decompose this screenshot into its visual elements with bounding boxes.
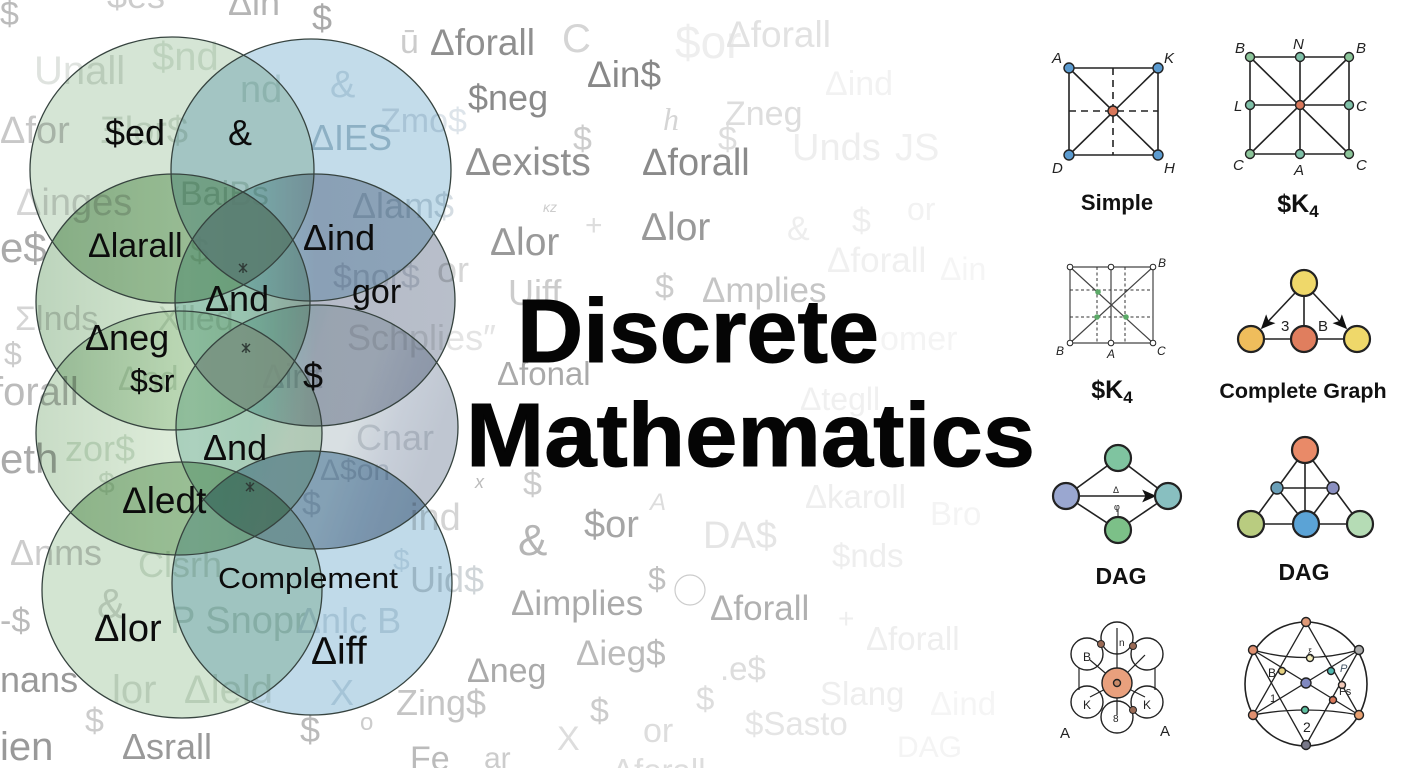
background: scattered faded math symbols: DAG (897, 731, 962, 764)
background: scattered faded math symbols: $or (584, 504, 639, 546)
background: scattered faded math symbols: or (437, 249, 469, 290)
background: scattered faded math symbols: or (643, 712, 673, 750)
background: scattered faded math symbols: $ (655, 268, 674, 306)
background: scattered faded math symbols: X (330, 672, 354, 713)
graph: circular star: 1 (1270, 693, 1276, 705)
graph: K4 grid: N (1293, 36, 1304, 53)
background: scattered faded math symbols: Δneg (467, 652, 546, 690)
background: scattered faded math symbols: Uiff (508, 272, 562, 313)
graph: Simple: K (1164, 50, 1175, 67)
background: scattered faded math symbols: $ (4, 336, 22, 372)
graph: Simple: Simple (1081, 190, 1153, 215)
background: scattered faded math symbols: $ (718, 120, 737, 158)
background: scattered faded math symbols: $Sasto (745, 705, 848, 742)
background: scattered faded math symbols: Δfor (0, 110, 70, 152)
background: scattered faded math symbols: Ξlor$ (100, 110, 188, 152)
background: scattered faded math symbols: e$ (0, 224, 47, 271)
background: scattered faded math symbols: & (787, 210, 810, 248)
graph: Simple: H (1164, 160, 1175, 177)
background: scattered faded math symbols: $ (573, 120, 592, 158)
venn region labels: Δlarall (88, 227, 183, 265)
background: scattered faded math symbols: Δforall (642, 142, 750, 184)
background: scattered faded math symbols: h (663, 101, 679, 137)
background: scattered faded math symbols: Δtegll (800, 381, 880, 417)
background: scattered faded math symbols: $ (393, 544, 410, 577)
graph: Simple (1051, 50, 1175, 215)
venn region labels: Δneg (85, 317, 169, 358)
background: scattered faded math symbols: zor$ (65, 428, 135, 469)
background: scattered faded math symbols: Schplies″ (347, 317, 496, 358)
background: scattered faded math symbols: P Snopr (170, 600, 307, 642)
background: scattered faded math symbols: lor (112, 668, 156, 712)
graph: K4 grid: B (1356, 40, 1366, 57)
venn region labels: Δiff (311, 630, 367, 673)
background: scattered faded math symbols: Δlam$ (352, 185, 454, 226)
graph: DAG diamond (1053, 445, 1181, 589)
background: scattered faded math symbols: Zing$ (396, 682, 486, 723)
graph: K4 grid: C (1356, 98, 1367, 115)
graph: wheel of circles (1060, 622, 1170, 742)
graph: DAG diamond: DAG (1095, 563, 1147, 589)
graph: K4 dashed lattice: 4 (1123, 388, 1133, 407)
graph: wheel of circles: B (1083, 650, 1091, 664)
background: scattered faded math symbols: X (557, 720, 580, 758)
background: scattered faded math symbols (0, 0, 996, 768)
background: scattered faded math symbols: Unds (792, 127, 881, 169)
background: scattered faded math symbols: $ (648, 561, 666, 597)
background: scattered faded math symbols: $ (523, 465, 542, 503)
background: scattered faded math symbols: Δlor (641, 206, 710, 249)
graph: K4 grid: 4 (1309, 202, 1319, 221)
background: scattered faded math symbols: Δirft (262, 358, 323, 396)
venn diagram (30, 37, 460, 718)
background: scattered faded math symbols: Δsrall (122, 726, 212, 767)
graph: wheel of circles: K (1083, 698, 1091, 712)
graph: Complete Graph: Complete Graph (1219, 379, 1387, 403)
background: scattered faded math symbols: Δforall (710, 589, 809, 628)
venn region labels: $ed (105, 112, 165, 153)
background: scattered faded math symbols: Zneg (725, 95, 802, 133)
graph: circular star: ξ (1308, 647, 1312, 657)
background: scattered faded math symbols: A (648, 489, 666, 516)
graph: circular star: 2 (1303, 719, 1311, 735)
graph: K4 grid: L (1234, 98, 1242, 115)
background: scattered faded math symbols: $nd (152, 35, 219, 79)
background: scattered faded math symbols: $or (675, 16, 741, 68)
background: scattered faded math symbols: Zmo$ (380, 102, 467, 140)
background: scattered faded math symbols: .e$ (720, 650, 766, 687)
graph: wheel of circles: A (1060, 725, 1070, 742)
graph: K4 grid: C (1356, 157, 1367, 174)
graph: DAG diamond: φ (1114, 502, 1120, 512)
background: scattered faded math symbols: nd (240, 69, 282, 111)
background: scattered faded math symbols: Δlor (490, 221, 559, 264)
background: scattered faded math symbols: Δind (930, 685, 996, 722)
graph: Complete Graph (1219, 270, 1387, 403)
venn region labels: Δind (303, 217, 375, 258)
background: scattered faded math symbols: Δnlc B (297, 600, 401, 641)
background: scattered faded math symbols: Δind (825, 65, 893, 103)
background: scattered faded math symbols: & (518, 516, 547, 565)
background: scattered faded math symbols: Clsrh (138, 544, 222, 585)
background: scattered faded math symbols: $ (590, 692, 609, 730)
graph: Simple: A (1051, 50, 1062, 67)
background: scattered faded math symbols: Uid$ (410, 559, 484, 600)
background: scattered faded math symbols: Slang (820, 675, 904, 712)
graph: K4 dashed lattice: B (1056, 344, 1064, 358)
background: scattered faded math symbols: or (907, 191, 936, 227)
graph: Complete Graph: 3 (1281, 318, 1289, 335)
background: scattered faded math symbols: omer (880, 320, 957, 358)
background: scattered faded math symbols: Δieg$ (576, 634, 666, 673)
venn region labels: gor (352, 273, 401, 311)
background: scattered faded math symbols: DA$ (703, 515, 777, 557)
background: scattered faded math symbols: Δinges (16, 182, 132, 224)
background: scattered faded math symbols: Δin (940, 251, 986, 287)
background: scattered faded math symbols: κz (543, 199, 557, 215)
graph: K4 dashed lattice: B (1158, 256, 1166, 270)
background: scattered faded math symbols: Δkaroll (805, 478, 906, 515)
graph: K4 grid (1233, 36, 1367, 221)
background: scattered faded math symbols: Cnar (356, 417, 434, 458)
venn circles (30, 37, 460, 718)
background: scattered faded math symbols: $nds (832, 537, 904, 574)
venn region labels: Δlor (94, 608, 162, 650)
graph: DAG triangle (1238, 437, 1373, 585)
graph: K4 dashed lattice: $K (1091, 376, 1123, 404)
background: scattered faded math symbols: o (360, 709, 373, 736)
title (466, 282, 1035, 486)
background: scattered faded math symbols: & (97, 580, 125, 627)
background: scattered faded math symbols: JS (895, 127, 939, 169)
background: scattered faded math symbols: $nor$ (333, 258, 420, 296)
background: scattered faded math symbols: x (474, 472, 485, 492)
background: scattered faded math symbols: $neg (468, 77, 548, 118)
venn region labels: Δledt (122, 480, 207, 521)
background: scattered faded math symbols: $ (302, 485, 321, 523)
venn region labels: Complement (218, 563, 398, 595)
venn region labels: Δnd (205, 278, 269, 319)
graph: K4 dashed lattice (1056, 256, 1166, 407)
title: Discrete (517, 282, 879, 382)
background: scattered faded math symbols: BaiBs (180, 175, 269, 213)
graph: circular star (1245, 618, 1367, 750)
graph: wheel of circles: K (1143, 698, 1151, 712)
background: scattered faded math symbols: $ (696, 680, 714, 717)
graph: wheel of circles: A (1160, 723, 1170, 740)
graph: K4 grid: B (1235, 40, 1245, 57)
background: scattered faded math symbols: Xlled (158, 300, 234, 338)
background: scattered faded math symbols: C (562, 17, 591, 61)
graph: DAG diamond: Δ (1113, 485, 1119, 495)
background: scattered faded math symbols: Σlnds (15, 300, 98, 338)
background: scattered faded math symbols: Δleld (184, 668, 273, 712)
background: scattered faded math symbols: Δforall (726, 14, 831, 55)
background: scattered faded math symbols: & (330, 64, 355, 106)
background: scattered faded math symbols: Δforall (866, 620, 960, 657)
background: scattered faded math symbols: $ (85, 702, 104, 740)
background: scattered faded math symbols: Δimplies (511, 584, 643, 623)
background: scattered faded math symbols: ind (410, 497, 461, 539)
graph: Complete Graph: B (1318, 318, 1328, 335)
background: scattered faded math symbols: + (585, 209, 603, 242)
background: scattered faded math symbols: $ (98, 467, 115, 500)
background: scattered faded math symbols: Δfonal (497, 355, 591, 392)
graph: K4 grid: $K (1277, 190, 1309, 218)
background: scattered faded math symbols: Δexists (465, 141, 591, 184)
graph: circular star: B (1268, 666, 1276, 680)
background: scattered faded math symbols: Unall (34, 49, 125, 93)
title: Mathematics (466, 386, 1035, 486)
graph: K4 grid: C (1233, 157, 1244, 174)
venn intersection stars (239, 263, 254, 492)
background: scattered faded math symbols: nans (0, 659, 78, 700)
background: scattered faded math symbols: Δforall (827, 241, 926, 280)
graph: wheel of circles: 8 (1113, 714, 1119, 725)
graph: K4 dashed lattice: A (1106, 347, 1115, 361)
background: scattered faded math symbols: + (838, 603, 854, 634)
background: scattered faded math symbols: Δmplies (702, 271, 827, 310)
graph: circular star: Fs (1339, 686, 1352, 698)
background: scattered faded math symbols: eth (0, 435, 58, 482)
background: scattered faded math symbols: ū (400, 23, 419, 61)
venn region labels (85, 112, 401, 673)
background: scattered faded math symbols: Δnd (118, 360, 179, 398)
background: scattered faded math symbols: $ (300, 709, 320, 750)
background: scattered faded math symbols: Δin$ (587, 54, 661, 95)
venn region labels: Δnd (203, 427, 267, 468)
background: scattered faded math symbols: Δnms (10, 532, 102, 573)
graph: Simple: D (1052, 160, 1063, 177)
background: scattered faded math symbols: Bro (930, 495, 981, 532)
background: scattered faded math symbols: Δforall (430, 22, 535, 63)
graph: K4 dashed lattice: C (1157, 344, 1166, 358)
background: scattered faded math symbols: Δ$on (320, 454, 390, 487)
background: scattered faded math symbols: $ (852, 202, 871, 240)
graph: DAG triangle: DAG (1278, 559, 1330, 585)
background: scattered faded math symbols: ien (0, 725, 53, 768)
venn region labels: $sr (130, 363, 175, 399)
venn region labels: $ (303, 355, 323, 396)
background: scattered faded math symbols: -$ (0, 602, 30, 640)
venn region labels: & (228, 112, 252, 153)
background: scattered faded math symbols: ΔIES (310, 117, 392, 158)
graph: K4 grid: A (1293, 162, 1304, 179)
graph: wheel of circles: n (1119, 638, 1125, 649)
background: scattered faded math symbols: $ (190, 232, 209, 270)
graph: circular star: P (1340, 663, 1348, 675)
